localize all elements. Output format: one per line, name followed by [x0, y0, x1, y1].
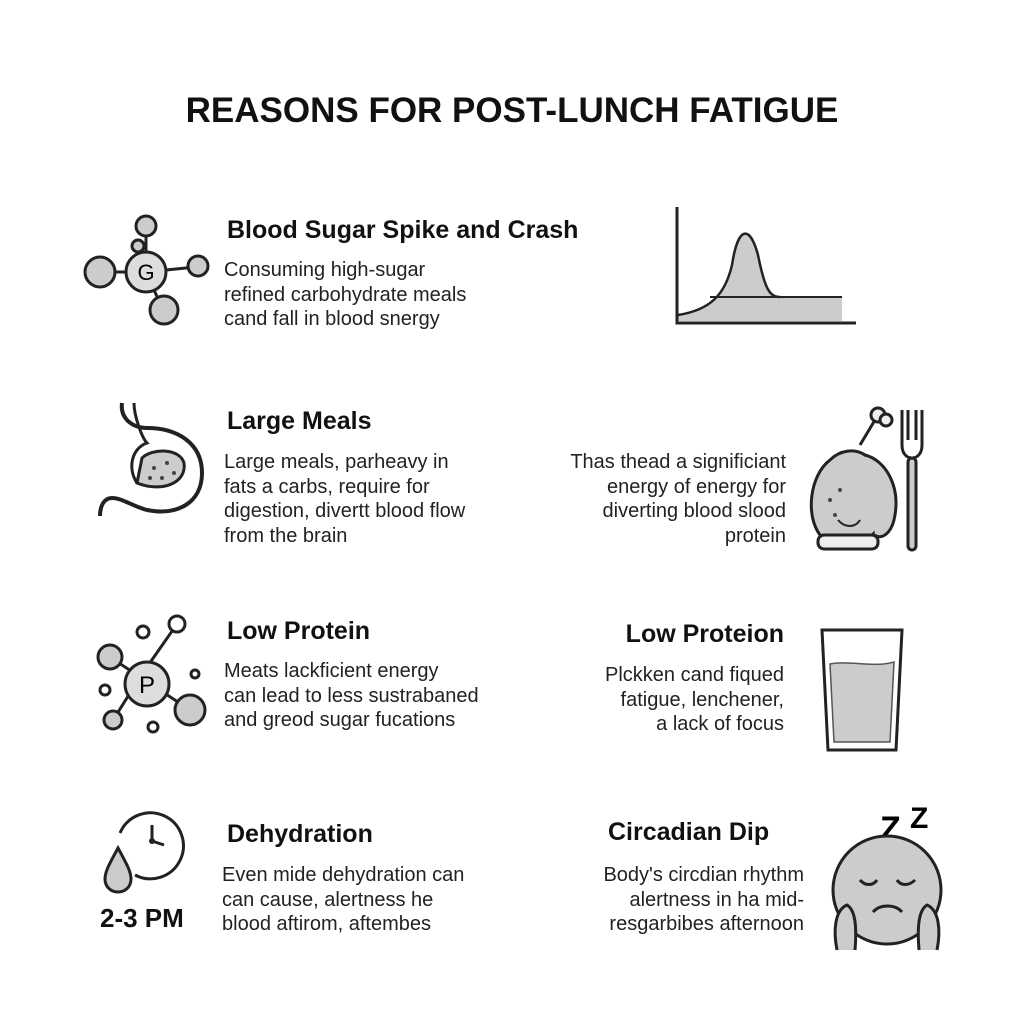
- text: blood sugar: [224, 259, 466, 330]
- text: large meals right: Thas thead a significiant: [570, 451, 786, 473]
- text: large meals right: diverting blood slood: [603, 500, 786, 522]
- text: blood sugar: Consuming high-sugar: [224, 259, 425, 281]
- text: large meals right: energy of energy for: [607, 476, 786, 498]
- icon: sleepy face: [832, 802, 942, 950]
- text: circadian dip: [603, 864, 804, 935]
- heading: circadian dip: Circadian Dip: [608, 818, 769, 846]
- text: low protein right: fatigue, lenchener,: [621, 688, 784, 710]
- icon: glucose molecule: [84, 214, 210, 326]
- icon: glucose molecule: G: [137, 260, 155, 285]
- text: dehydration: [222, 864, 464, 935]
- text: circadian dip: resgarbibes afternoon: [609, 913, 804, 935]
- icon: clock and drop: [104, 811, 185, 894]
- text: blood sugar: cand fall in blood snergy: [224, 308, 440, 330]
- text: low protein: can lead to less sustrabaned: [224, 684, 479, 706]
- text: low protein: and greod sugar fucations: [224, 709, 455, 731]
- icon: protein molecule: P: [139, 672, 155, 699]
- icon: glass of water: [820, 628, 904, 752]
- label: 2-3 PM: 2-3 PM: [100, 903, 184, 933]
- text: large meals: from the brain: [224, 524, 347, 546]
- icon: sleepy face: Z: [910, 802, 928, 835]
- icon: protein molecule: [96, 614, 206, 734]
- chart: spike curve: [676, 207, 856, 324]
- text: low protein right: a lack of focus: [656, 713, 784, 735]
- text: large meals: fats a carbs, require for: [224, 476, 430, 498]
- text: large meals right: protein: [725, 524, 786, 546]
- text: dehydration: can cause, alertness he: [222, 888, 433, 910]
- icon: sleepy face: Z: [880, 810, 901, 848]
- text: large meals: Large meals, parheavy in: [224, 451, 449, 473]
- text: large meals: [224, 451, 466, 546]
- text: dehydration: blood aftirom, aftembes: [222, 913, 431, 935]
- text: large meals right: [570, 451, 786, 546]
- text: low protein: [224, 660, 479, 731]
- heading: low protein right: Low Proteion: [626, 620, 784, 648]
- text: low protein: Meats lackficient energy: [224, 660, 439, 682]
- text: dehydration: Even mide dehydration can: [222, 864, 464, 886]
- text: circadian dip: alertness in ha mid-: [629, 888, 804, 910]
- icon: stomach: [98, 402, 204, 516]
- text: circadian dip: Body's circdian rhythm: [603, 864, 804, 886]
- text: blood sugar: refined carbohydrate meals: [224, 284, 466, 306]
- text: low protein right: [605, 664, 784, 735]
- heading: dehydration: Dehydration: [227, 820, 373, 848]
- heading: low protein: Low Protein: [227, 617, 370, 645]
- title: REASONS FOR POST-LUNCH FATIGUE: [186, 91, 838, 130]
- heading: blood sugar: Blood Sugar Spike and Crash: [227, 216, 578, 244]
- icon: chicken and fork: [810, 406, 924, 552]
- heading: large meals: Large Meals: [227, 407, 372, 435]
- text: low protein right: Plckken cand fiqued: [605, 664, 784, 686]
- text: large meals: digestion, divertt blood flow: [224, 500, 465, 522]
